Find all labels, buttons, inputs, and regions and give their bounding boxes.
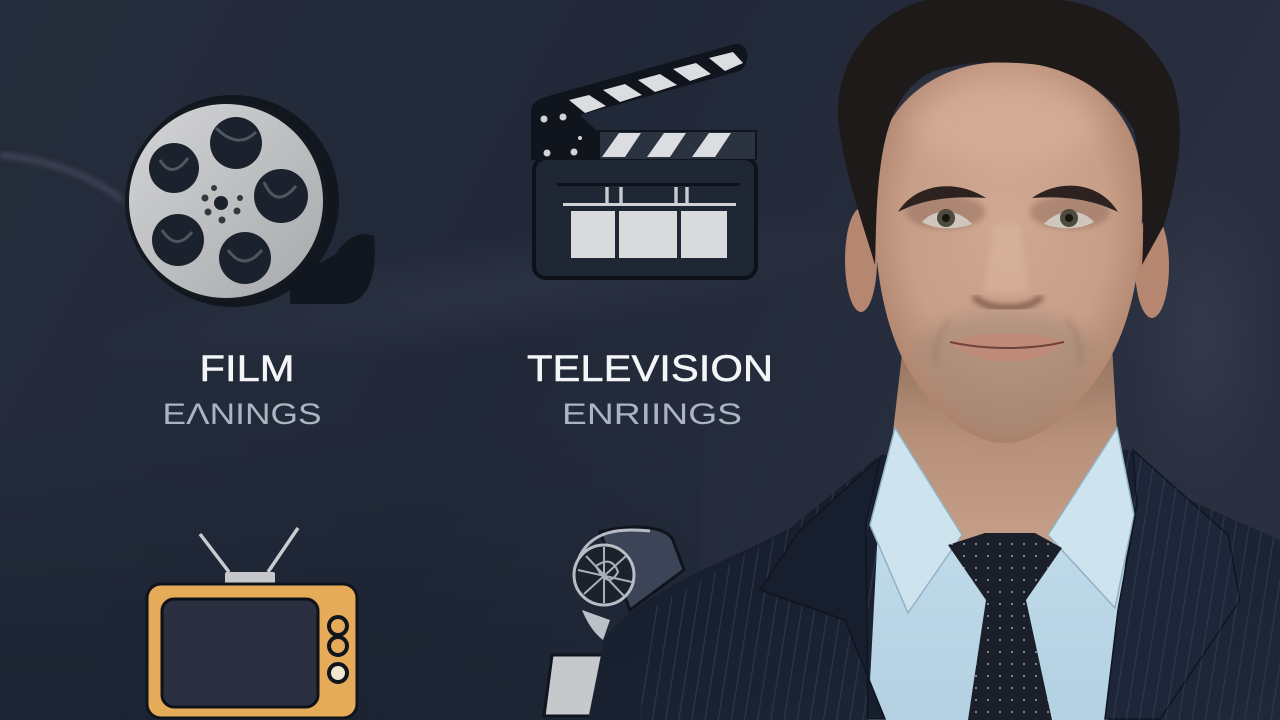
subheading: film earnings: EΛNINGS xyxy=(162,398,322,431)
mouth xyxy=(950,334,1064,361)
eyebrows xyxy=(898,186,986,212)
icon: retro television xyxy=(147,528,357,718)
eye sockets xyxy=(905,195,985,229)
hair xyxy=(838,0,1180,265)
portrait: man in suit xyxy=(588,0,1280,720)
collar xyxy=(870,428,962,613)
face xyxy=(874,62,1142,443)
icon: clapperboard xyxy=(531,44,757,278)
ears xyxy=(845,208,877,312)
suit jacket xyxy=(588,450,1280,720)
icon: film reel xyxy=(125,95,375,307)
lapels xyxy=(760,458,885,719)
shirt xyxy=(868,470,1132,720)
smile lines xyxy=(936,318,1080,364)
heading: film: FILM xyxy=(200,348,294,389)
subheading: television earnings: ENRIINGS xyxy=(562,398,742,431)
nose xyxy=(984,225,1028,292)
eyes xyxy=(922,212,972,228)
forehead highlight xyxy=(910,85,1100,165)
necktie xyxy=(948,533,1062,720)
neck xyxy=(893,345,1117,560)
stubble xyxy=(915,312,1098,436)
heading: television: TELEVISION xyxy=(527,348,773,389)
icon: film camera xyxy=(544,527,684,716)
